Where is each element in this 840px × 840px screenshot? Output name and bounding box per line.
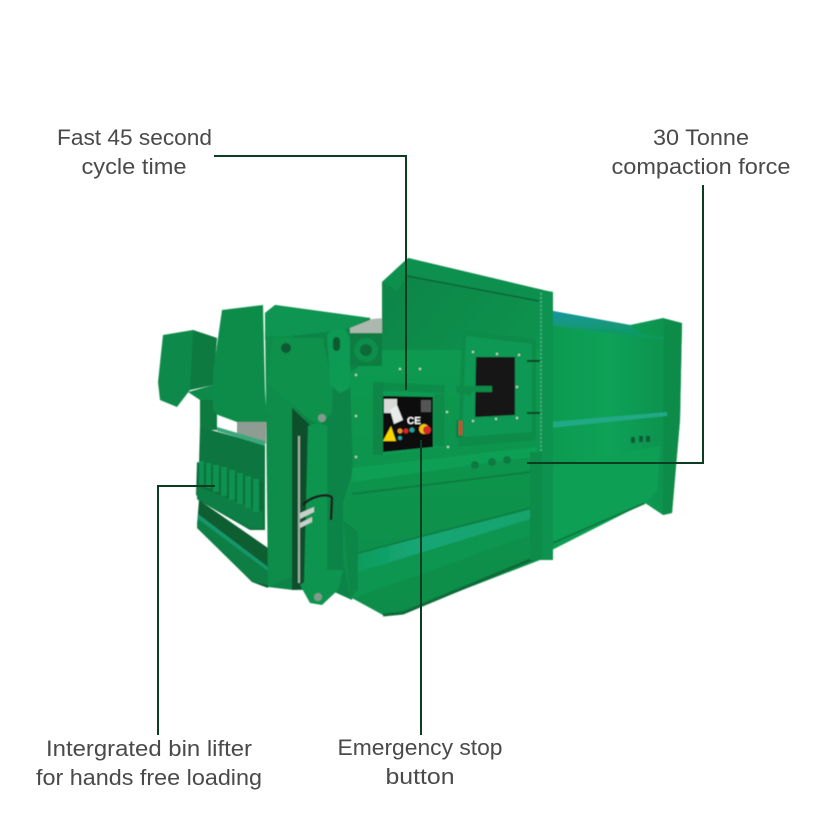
left vertical frame	[266, 336, 293, 587]
label: bin lifter: Intergrated bin lifter	[46, 736, 252, 761]
front main body	[343, 350, 542, 615]
label: compaction force: 30 Tonne	[653, 125, 749, 150]
back fill behind frame	[265, 305, 380, 600]
lower arm foot	[300, 570, 343, 605]
bin lifter rear flap	[158, 330, 217, 430]
upper slotted bracket	[327, 329, 351, 393]
bin lifter comb teeth	[196, 461, 263, 528]
bearing block	[350, 333, 382, 366]
door window frame	[456, 330, 540, 447]
panel warning triangle	[383, 426, 396, 441]
hydraulic cylinder	[299, 414, 332, 597]
label: bin lifter: for hands free loading	[36, 765, 262, 790]
control panel	[383, 396, 433, 452]
label: emergency stop	[338, 735, 502, 789]
bin lifter body	[198, 421, 266, 530]
bin lifter base tray	[197, 500, 268, 588]
label: bin lifter	[36, 736, 262, 790]
door hopper	[382, 258, 553, 560]
compactor machine	[158, 258, 682, 615]
label: emergency stop: button	[386, 764, 454, 789]
panel buttons	[398, 428, 414, 440]
rivets	[355, 351, 520, 458]
label: emergency stop: Emergency stop	[338, 735, 502, 760]
pivot arm plate	[267, 338, 333, 425]
hopper top opening	[350, 318, 384, 350]
leader line: compaction force	[527, 185, 703, 463]
upper hood	[265, 305, 370, 340]
label: cycle time	[57, 125, 212, 179]
leader line: emergency stop	[420, 440, 422, 735]
label: compaction force	[612, 125, 790, 179]
panel switch	[421, 400, 431, 412]
rear body section	[535, 311, 682, 560]
emergency stop button	[419, 424, 431, 434]
label: compaction force: compaction force	[612, 154, 790, 179]
arm pivot hole	[281, 343, 291, 353]
label: cycle time: Fast 45 second	[57, 125, 212, 150]
panel CE mark: CE	[407, 416, 421, 427]
label: cycle time: cycle time	[82, 154, 186, 179]
panel socket	[384, 399, 403, 424]
body knobs	[471, 456, 511, 469]
leader line: bin lifter	[158, 486, 215, 735]
leader line: cycle time	[214, 156, 406, 390]
bracket slot	[333, 337, 340, 351]
lifter front flap	[213, 305, 267, 422]
control panel housing	[373, 382, 446, 456]
frame slot	[292, 408, 310, 590]
